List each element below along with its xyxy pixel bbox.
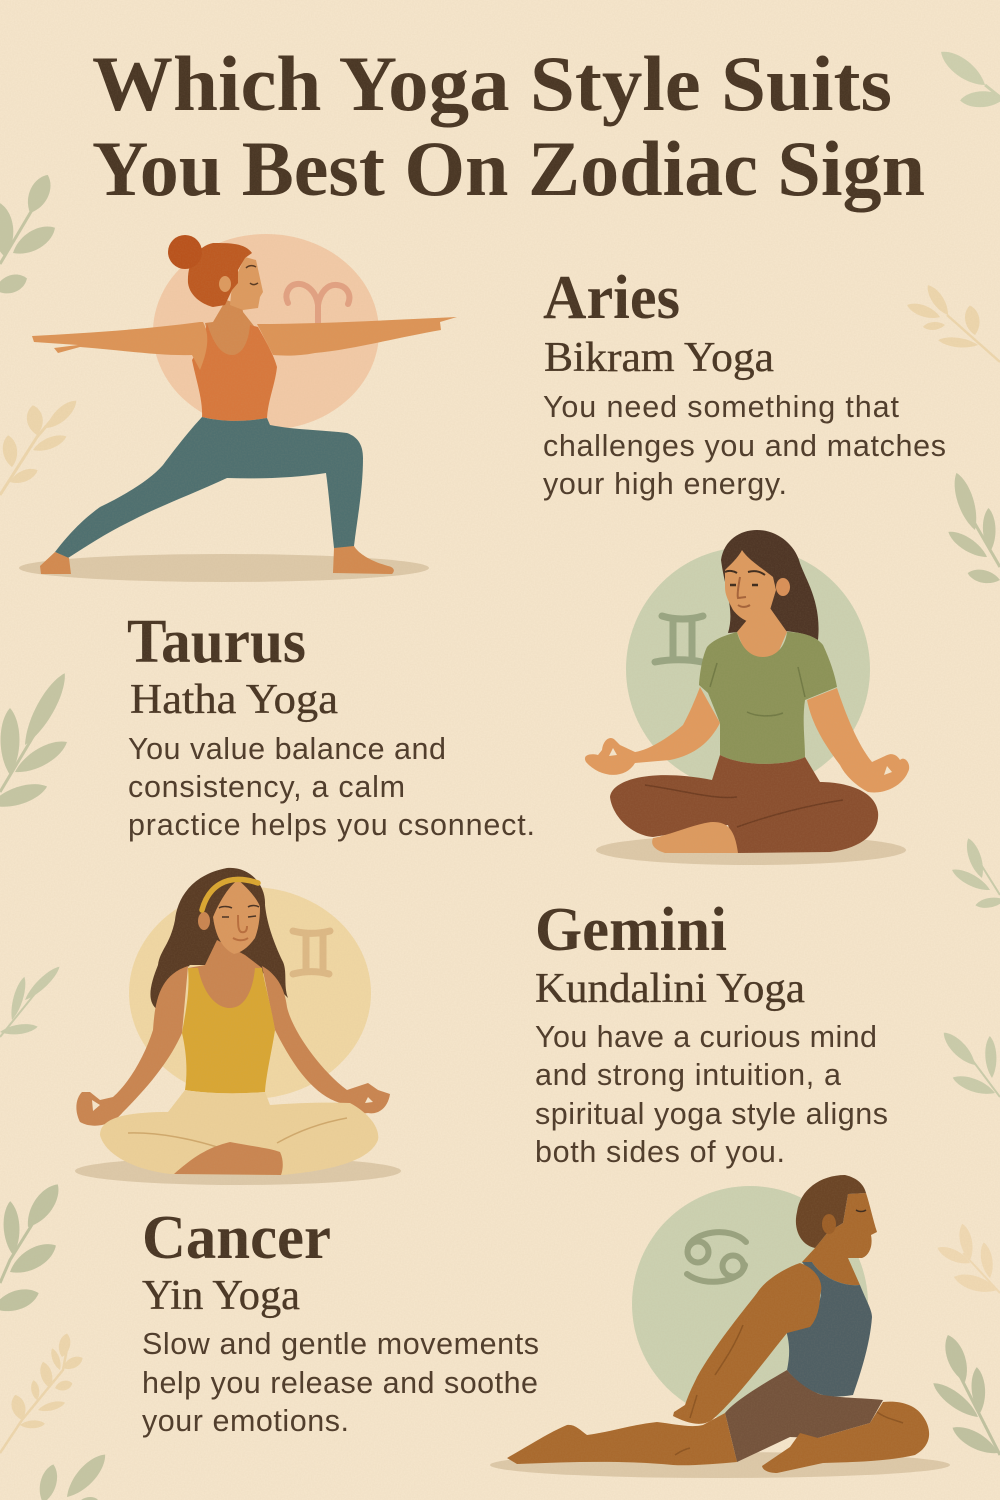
hair and bun [188,243,252,307]
neck [737,608,787,660]
back leg [762,1402,929,1473]
closed eye [856,1210,866,1212]
near arm and hand [32,322,207,370]
text block: Gemini: Kundalini Yoga [535,966,805,1012]
illustration: warrior pose for Aries [19,234,457,582]
mudra finger gaps [609,748,892,775]
face [213,880,260,954]
botanical leaves: right beige [905,282,1000,362]
botanical leaves: bottom edge sage [35,1449,112,1500]
text block: Gemini: both sides of you. [535,1135,785,1169]
ear [822,1214,836,1234]
ear [219,276,231,292]
leggings [55,417,363,558]
illustration: seated pose for Taurus [585,530,909,865]
text block: Cancer: help you release and soothe [142,1366,538,1400]
text block: Cancer [142,1204,539,1438]
zodiac symbol [293,931,330,974]
sun circle [153,234,379,430]
circle backdrop [129,887,371,1099]
trouser creases [645,785,843,827]
illustration: pigeon pose for Cancer [490,1175,950,1478]
trousers [100,1090,378,1175]
tank top [192,323,277,421]
aries symbol [286,284,349,326]
face and neck [802,1193,877,1285]
text block: Cancer: Slow and gentle movements [142,1327,539,1361]
neck and chest [188,940,262,1012]
trousers [610,755,878,853]
title: You Best On Zodiac Sign [92,125,925,212]
text block: Taurus: You value balance and [128,732,446,766]
botanical leaves: left beige [0,396,81,495]
botanical leaves: right sage [945,471,1000,586]
botanical leaves: right middle sage [949,836,1000,910]
shirt creases [710,663,805,716]
left arm and hand [585,687,720,775]
tank top [182,968,275,1093]
text block: Aries [543,264,946,501]
text block: Gemini: Gemini [535,896,727,964]
text block: Gemini: and strong intuition, a [535,1058,841,1092]
illustration: seated pose for Gemini [75,868,401,1185]
botanical leaves: left top sage [0,171,60,298]
text block: Cancer: Cancer [142,1204,331,1272]
mudra finger gaps [92,1097,373,1111]
botanical leaves: right lower beige [935,1223,1000,1297]
title [92,40,925,212]
zodiac symbol [655,616,703,662]
right arm and hand [807,688,909,793]
arm and hand [673,1263,821,1424]
hair [796,1175,866,1248]
ear [198,912,210,930]
ground shadow [75,1157,401,1185]
shorts [725,1370,883,1462]
hair [150,868,288,1010]
text block: Taurus: consistency, a calm [128,770,405,804]
text block: Aries: challenges you and matches [543,429,946,463]
botanical leaves: left bottom sage [0,1179,66,1317]
botanical leaves: right top sage [936,45,1000,108]
text block: Aries: Bikram Yoga [544,335,774,381]
ground shadow [490,1452,950,1478]
circle backdrop [632,1186,868,1422]
facial features [725,571,765,575]
far arm and hand [257,317,457,356]
facial features [219,906,259,917]
text block: Aries: You need something that [543,390,900,424]
text block: Aries: your high energy. [543,467,787,501]
t-shirt [699,632,837,764]
text block: Taurus: practice helps you csonnect. [128,808,535,842]
hair [721,530,819,640]
botanical leaves: right bottom sage [929,1332,1000,1460]
text block: Cancer: your emotions. [142,1404,349,1438]
trouser creases [128,1118,347,1147]
neck and chest [205,300,254,360]
text block: Aries: Aries [543,264,680,332]
botanical leaves: left lower sage [0,963,63,1037]
face [725,550,776,623]
text block: Taurus: Hatha Yoga [130,677,338,723]
text block: Gemini: You have a curious mind [535,1020,877,1054]
text block: Taurus: Taurus [127,608,306,676]
face [230,257,263,310]
botanical leaves: left bottom beige [0,1332,85,1453]
text block: Gemini [535,896,888,1169]
text block: Cancer: Yin Yoga [142,1273,300,1319]
front leg [507,1413,737,1465]
ear [776,578,790,596]
botanical leaves: right lower sage [939,1028,1000,1099]
cancer symbol [687,1232,746,1282]
feet [40,546,394,574]
botanical leaves: left middle sage [0,669,72,813]
closed eye and brow [246,266,258,284]
tank top [786,1262,872,1397]
ground shadow [596,835,906,865]
foot [652,822,738,853]
crossed foot [174,1142,283,1175]
text block: Gemini: spiritual yoga style aligns [535,1097,888,1131]
circle backdrop [626,547,870,791]
left arm and hand [76,966,188,1126]
ground shadow [19,554,429,582]
muscle lines [675,1325,903,1455]
headband [202,879,258,910]
title: Which Yoga Style Suits [92,40,892,127]
right arm and hand [262,966,390,1113]
text block: Taurus [127,608,535,842]
